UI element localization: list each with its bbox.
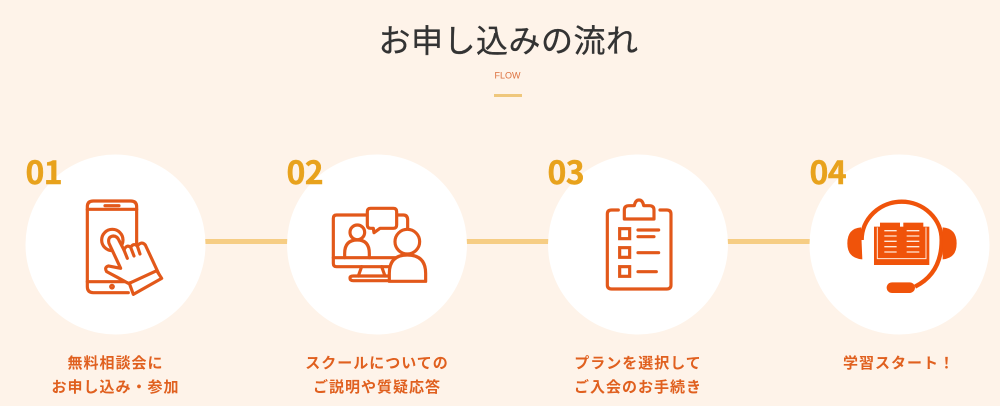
connector 2 to 3: [466, 239, 549, 244]
step 1 number: 01: [26, 148, 62, 194]
icon: smartphone with tapping hand: [87, 201, 162, 294]
heading underline: [494, 94, 522, 97]
step 2: [286, 148, 467, 397]
icon: clipboard checklist: [607, 200, 671, 289]
step 4: [810, 148, 990, 373]
step 3 number: 03: [548, 148, 584, 194]
step 1 label: 無料相談会に: [67, 352, 164, 373]
step 1 circle: [26, 154, 206, 334]
step 2 circle: [287, 154, 467, 334]
icon: book with headset: [847, 202, 957, 293]
step 3 label: プランを選択して: [574, 352, 702, 373]
subtitle: FLOW: FLOW: [494, 70, 521, 80]
step 2 label: ご説明や質疑応答: [313, 376, 441, 397]
step 3 circle: [548, 154, 728, 334]
connector 1 to 2: [205, 239, 288, 244]
step 4 number: 04: [810, 148, 846, 194]
step 4 circle: [810, 154, 990, 334]
step 1: [26, 148, 206, 397]
title: お申し込みの流れ: [378, 16, 639, 62]
step 3: [548, 148, 728, 397]
connector 3 to 4: [727, 239, 810, 244]
step 1 label: お申し込み・参加: [51, 376, 180, 397]
step 2 label: スクールについての: [305, 352, 449, 373]
icon: video call on monitor: [333, 208, 426, 281]
step 3 label: ご入会のお手続き: [574, 376, 702, 397]
step 4 label: 学習スタート！: [843, 352, 955, 373]
step 2 number: 02: [286, 148, 323, 194]
